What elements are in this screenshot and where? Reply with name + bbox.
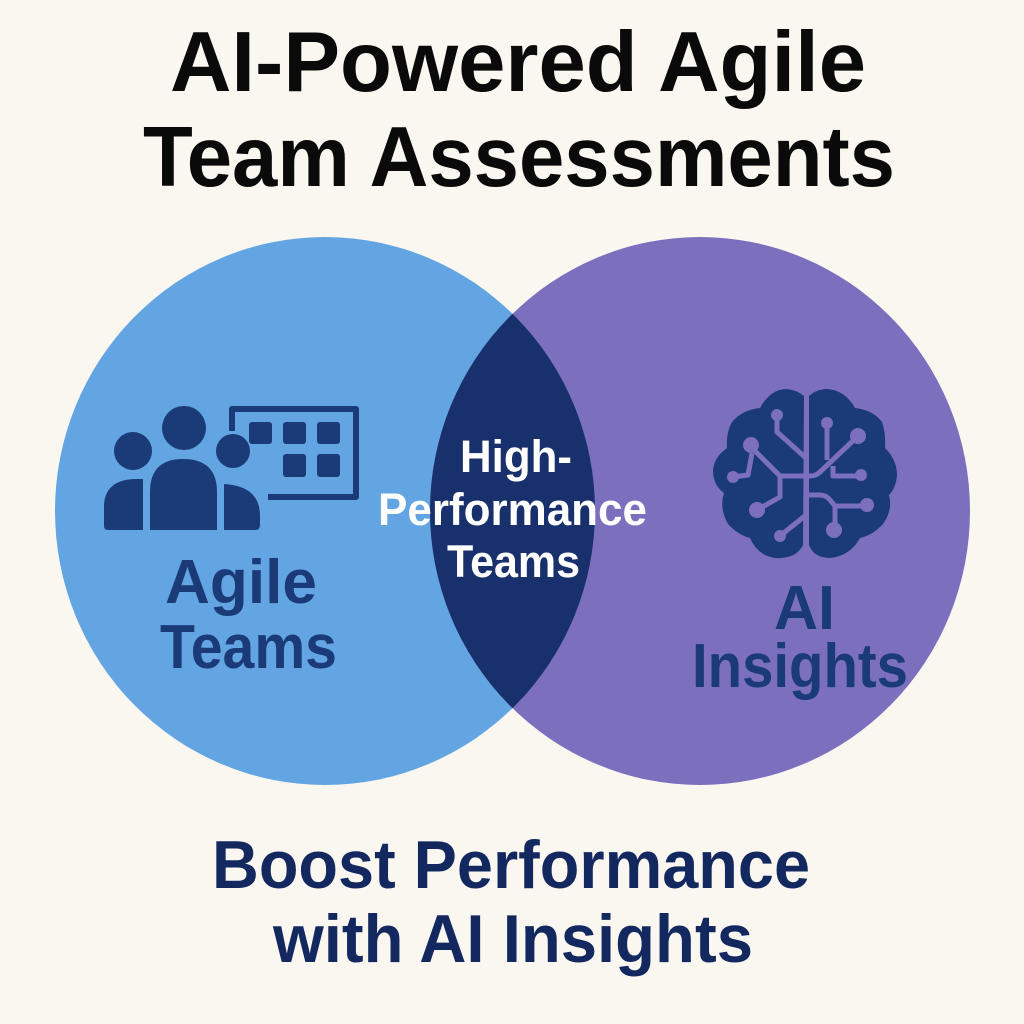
- venn circle: AI insights: [430, 237, 970, 785]
- label: AI insights: AI: [774, 574, 835, 643]
- venn circle: agile teams: [55, 237, 595, 785]
- label: high-performance teams: [378, 431, 647, 587]
- icon: team with board: [104, 406, 356, 530]
- label: agile teams: Teams: [160, 613, 337, 682]
- label: high-performance teams: Teams: [447, 536, 580, 587]
- label: high-performance teams: High-: [460, 431, 572, 482]
- tagline: with AI Insights: [272, 901, 753, 977]
- tagline: [212, 827, 810, 977]
- label: AI insights: [692, 574, 908, 701]
- title: Team Assessments: [143, 110, 895, 205]
- title: AI-Powered Agile: [170, 15, 866, 110]
- tagline: Boost Performance: [212, 827, 810, 903]
- venn overlap: high-performance teams: [430, 314, 595, 708]
- icon: AI brain: [713, 389, 897, 558]
- label: high-performance teams: Performance: [378, 484, 647, 535]
- title: [143, 15, 895, 205]
- label: AI insights: Insights: [692, 632, 908, 701]
- label: agile teams: [160, 548, 337, 682]
- label: agile teams: Agile: [165, 548, 317, 617]
